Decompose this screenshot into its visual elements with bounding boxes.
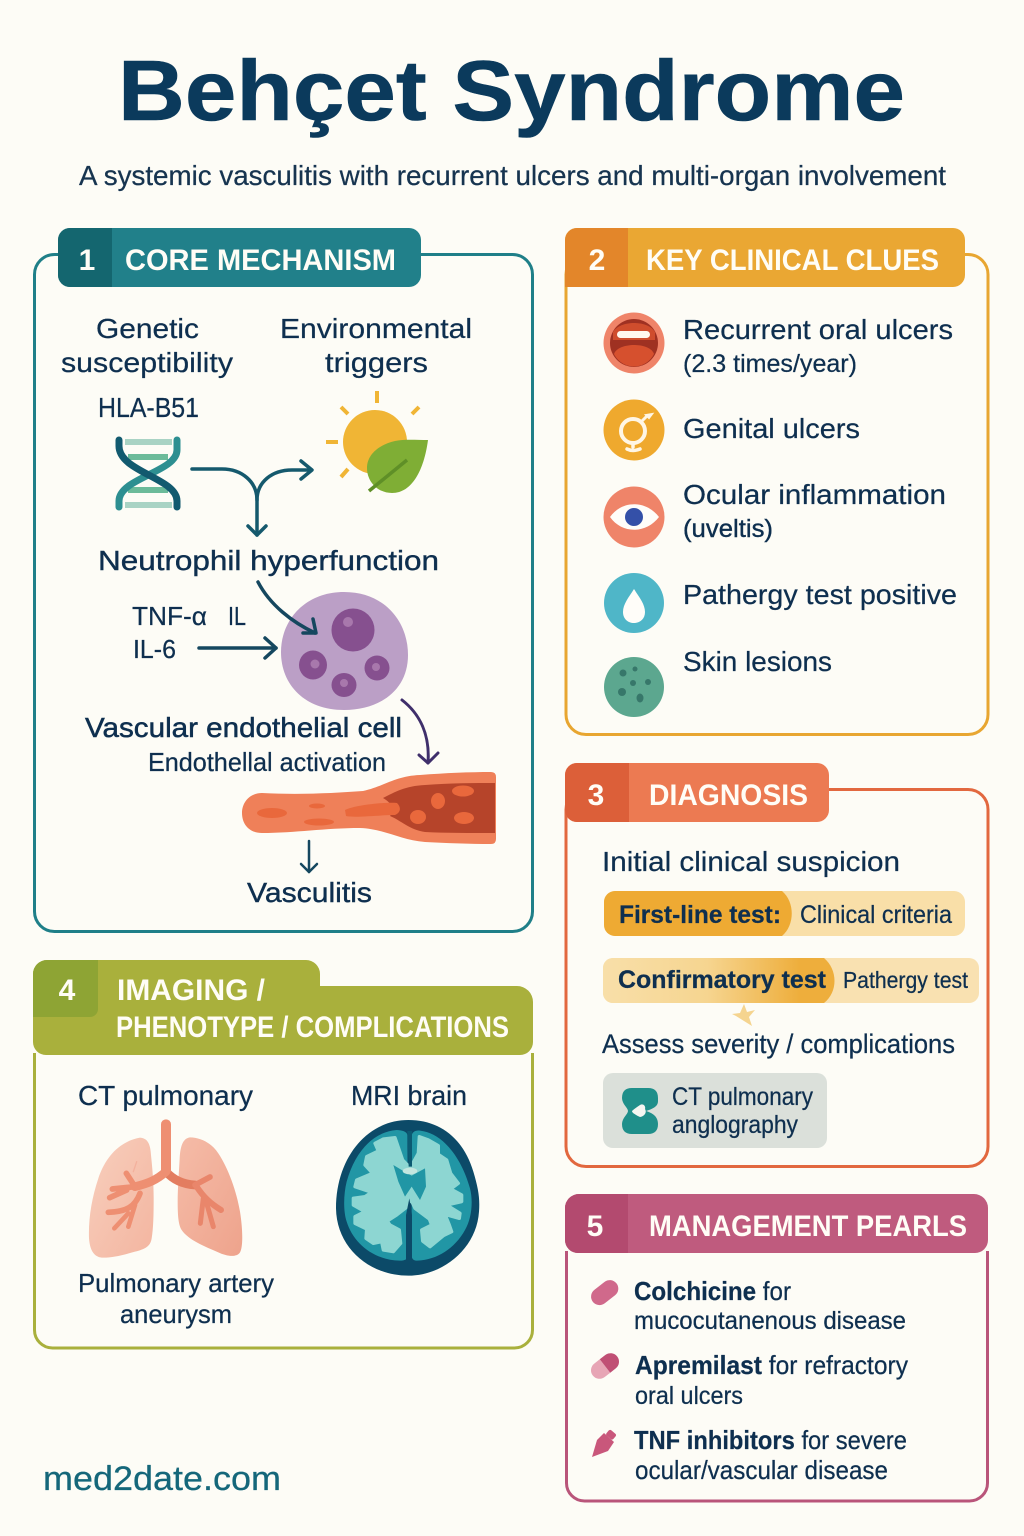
vasculitis label: Vasculitis xyxy=(247,877,372,908)
icon: inflamed vessel xyxy=(242,772,496,844)
icon: neutrophil cell xyxy=(281,592,408,710)
arrow: purple to vessel xyxy=(402,700,438,763)
clue: ocular inflammation: (uveltis) xyxy=(683,515,773,543)
item: colchicine: Colchicine for xyxy=(634,1276,791,1306)
item: colchicine xyxy=(588,1276,906,1335)
header: imaging: 4 xyxy=(59,974,76,1007)
icon: skin spots xyxy=(604,657,664,717)
arrow: branching pathway xyxy=(192,461,312,535)
icon: sun and leaf xyxy=(326,391,428,493)
CT pulmonary label: CT pulmonary xyxy=(78,1080,253,1111)
clue: ocular inflammation: Ocular inflammation xyxy=(683,479,946,510)
environmental triggers label: Environmental xyxy=(280,313,472,344)
CT angiography box xyxy=(603,1073,827,1148)
first-line test pill: Clinical criteria xyxy=(800,901,952,929)
genetic susceptibility label: Genetic xyxy=(96,313,199,344)
clue: skin lesions xyxy=(604,646,832,717)
header: diagnosis: DIAGNOSIS xyxy=(649,779,808,812)
header: imaging: PHENOTYPE / COMPLICATIONS xyxy=(116,1011,509,1044)
environmental triggers label: triggers xyxy=(325,347,428,378)
icon: gender symbol xyxy=(604,400,664,460)
confirmatory test pill: Pathergy test xyxy=(843,967,969,993)
pulmonary artery aneurysm caption xyxy=(78,1268,274,1329)
panel: imaging xyxy=(33,960,533,1348)
header: imaging xyxy=(33,960,533,1055)
cytokine labels: IL-6 xyxy=(133,634,176,664)
header: key clinical clues: 2 xyxy=(589,244,605,277)
header: key clinical clues: KEY CLINICAL CLUES xyxy=(646,244,939,277)
item: colchicine: mucocutanenous disease xyxy=(634,1307,906,1335)
header: diagnosis: 3 xyxy=(588,779,604,812)
first-line test pill: First-line test: xyxy=(619,901,781,929)
vascular endothelial cell label: Endothellal activation xyxy=(148,747,386,777)
cytokine labels xyxy=(132,601,246,664)
clue: recurrent oral ulcers: Recurrent oral ulcers xyxy=(683,314,953,345)
confirmatory test pill: Confirmatory test xyxy=(618,966,827,994)
first-line test pill xyxy=(604,891,965,936)
item: TNF inhibitors xyxy=(592,1425,907,1485)
panel: diagnosis xyxy=(565,763,988,1166)
item: apremilast xyxy=(588,1350,908,1410)
CT angiography box: CT pulmonary xyxy=(672,1083,813,1111)
header: management pearls: MANAGEMENT PEARLS xyxy=(649,1210,967,1243)
assess severity text: Assess severity / complications xyxy=(602,1029,955,1059)
icon: lungs badge xyxy=(622,1088,658,1134)
icon: injector xyxy=(592,1429,617,1457)
panel: management pearls xyxy=(565,1194,988,1501)
panel: key clinical clues xyxy=(565,228,988,734)
icon: eye xyxy=(604,486,664,548)
item: TNF inhibitors: ocular/vascular disease xyxy=(635,1455,888,1485)
genetic susceptibility label: HLA-B51 xyxy=(98,392,199,423)
icon: DNA helix xyxy=(119,440,177,507)
subtitle: A systemic vasculitis with recurrent ulcers and multi-organ involvement xyxy=(79,160,946,191)
icon: star xyxy=(732,1004,755,1026)
clue: genital ulcers: Genital ulcers xyxy=(683,413,860,444)
panel: core mechanism xyxy=(34,228,532,932)
icon: brain MRI xyxy=(336,1120,479,1276)
header: imaging: IMAGING / xyxy=(117,974,266,1007)
CT angiography box: anglography xyxy=(672,1111,798,1139)
icon: drop xyxy=(604,573,664,633)
clue: pathergy test xyxy=(604,573,957,633)
arrow: cytokines to cell xyxy=(199,638,276,658)
header: management pearls: 5 xyxy=(587,1210,603,1243)
icon: lungs xyxy=(89,1124,242,1258)
clue: recurrent oral ulcers: (2.3 times/year) xyxy=(683,350,857,378)
genetic susceptibility label xyxy=(61,313,233,423)
icon: mouth xyxy=(604,312,664,374)
item: TNF inhibitors: TNF inhibitors for severe xyxy=(634,1425,907,1455)
clue: recurrent oral ulcers xyxy=(604,312,953,378)
genetic susceptibility label: susceptibility xyxy=(61,347,233,378)
cytokine labels: TNF-α xyxy=(132,601,207,631)
arrow: vessel to vasculitis xyxy=(301,841,317,872)
pulmonary artery aneurysm caption: Pulmonary artery xyxy=(78,1268,274,1298)
arrow: to neutrophil xyxy=(258,582,316,633)
item: apremilast: Apremilast for refractory xyxy=(635,1350,908,1380)
initial suspicion text: Initial clinical suspicion xyxy=(602,846,900,877)
header: management pearls xyxy=(565,1194,988,1253)
clue: genital ulcers xyxy=(604,400,860,460)
clue: ocular inflammation xyxy=(604,479,946,548)
header: key clinical clues xyxy=(565,228,965,287)
header: core mechanism xyxy=(58,228,421,287)
neutrophil hyperfunction label: Neutrophil hyperfunction xyxy=(98,545,439,576)
item: apremilast: oral ulcers xyxy=(635,1382,743,1410)
icon: pill xyxy=(588,1277,622,1309)
cytokine labels: IL xyxy=(228,601,246,631)
vascular endothelial cell label xyxy=(85,712,402,777)
header: core mechanism: 1 xyxy=(79,244,95,277)
title: Behçet Syndrome xyxy=(118,44,905,139)
environmental triggers label xyxy=(280,313,472,378)
header: diagnosis xyxy=(565,763,829,822)
icon: capsule xyxy=(588,1350,622,1382)
clue: pathergy test: Pathergy test positive xyxy=(683,579,957,610)
MRI brain label: MRI brain xyxy=(351,1080,467,1111)
header: core mechanism: CORE MECHANISM xyxy=(125,244,396,277)
vascular endothelial cell label: Vascular endothelial cell xyxy=(85,712,402,743)
pulmonary artery aneurysm caption: aneurysm xyxy=(120,1299,232,1329)
clue: skin lesions: Skin lesions xyxy=(683,646,832,677)
confirmatory test pill xyxy=(603,958,979,1003)
footer: website: med2date.com xyxy=(43,1460,281,1498)
